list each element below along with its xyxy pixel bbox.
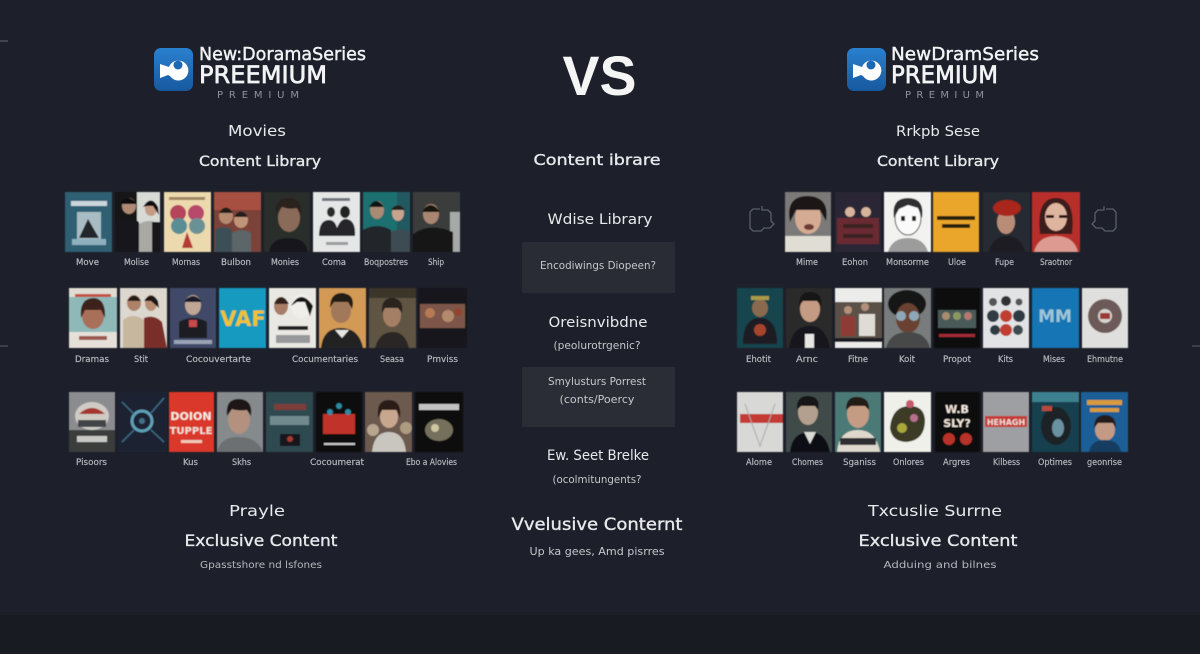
logo: right service xyxy=(847,44,1039,101)
poster labels row 1 right xyxy=(796,258,1072,268)
panel: right service xyxy=(737,44,1128,571)
poster labels row 3 right: Argres xyxy=(943,458,970,468)
poster labels row 1 left: Monies xyxy=(271,258,299,268)
poster row 2 left: VAF xyxy=(220,307,266,331)
poster labels row 1 left: Molise xyxy=(124,258,149,268)
poster labels row 2 right: Fitne xyxy=(848,355,868,365)
heading: VS: VS xyxy=(562,44,636,107)
poster row 2 right xyxy=(737,288,1128,348)
poster labels row 1 left xyxy=(76,258,444,268)
heading: content library left: Content Library xyxy=(199,154,321,170)
poster labels row 1 right: Uloe xyxy=(948,258,966,268)
heading: content library right: Content Library xyxy=(877,154,999,170)
poster labels row 1 right: Eohon xyxy=(842,258,868,268)
poster labels row 1 right: Fupe xyxy=(995,258,1014,268)
heading: content library center: Content ibrare xyxy=(534,151,660,169)
box: third comparison: Smylusturs Porrest xyxy=(548,376,646,388)
poster labels row 1 right: Mime xyxy=(796,258,818,268)
poster labels row 3 right: geonrise xyxy=(1087,458,1122,468)
logo: left service xyxy=(154,44,366,101)
text block: exclusive content right xyxy=(858,502,1018,571)
text block: exclusive content center: Vvelusive Conternt xyxy=(512,515,683,535)
poster labels row 2 left: Cocumentaries xyxy=(292,355,358,365)
poster labels row 2 left: Dramas xyxy=(75,355,109,365)
heading: right category: Rrkpb Sese xyxy=(896,124,980,140)
poster labels row 3 left: Pisoors xyxy=(76,458,107,468)
poster row 3 right: W.B xyxy=(945,403,969,416)
poster row 3 right xyxy=(737,392,1128,452)
text block: exclusive content left xyxy=(184,502,338,571)
poster labels row 2 left: Seasa xyxy=(380,355,404,365)
poster labels row 3 right: Optimes xyxy=(1038,458,1072,468)
label: second comparison: (peolurotrgenic? xyxy=(554,340,640,352)
box: first comparison: Encodiwings Diopeen? xyxy=(540,260,656,272)
poster labels row 2 right: Ehmutne xyxy=(1087,355,1123,365)
label: fourth comparison xyxy=(547,448,649,486)
label: fourth comparison: Ew. Seet Brelke xyxy=(547,448,649,464)
poster labels row 2 right: Koit xyxy=(899,355,915,365)
text block: exclusive content left: Exclusive Content xyxy=(184,531,338,550)
panel: left service xyxy=(65,44,467,571)
poster labels row 1 left: Ship xyxy=(428,258,444,268)
poster labels row 2 left: Cocouvertarte xyxy=(186,355,251,365)
icon: left device outline xyxy=(750,206,774,231)
panel: center comparison xyxy=(512,44,683,558)
text block: exclusive content center: Up ka gees, Amd pisrres xyxy=(530,546,664,558)
poster row 3 right: SLY? xyxy=(943,417,971,430)
poster labels row 3 right: Onlores xyxy=(893,458,924,468)
poster labels row 1 left: Bulbon xyxy=(221,258,251,268)
poster row 2 right: MM xyxy=(1038,307,1072,327)
logo: left service: PREEMIUM xyxy=(199,61,327,89)
text block: exclusive content right: Adduing and bilnes xyxy=(884,560,996,571)
icon: right device outline xyxy=(1092,206,1116,231)
poster labels row 3 right: Kilbess xyxy=(993,458,1020,468)
icon: right camera logo xyxy=(847,48,886,91)
logo: right service: PREMIUM xyxy=(905,90,984,101)
box: first comparison xyxy=(522,242,675,293)
poster labels row 2 left xyxy=(75,355,458,365)
poster row 2 left xyxy=(69,288,467,348)
poster labels row 3 left: Skhs xyxy=(232,458,251,468)
poster row 1 left xyxy=(65,192,460,252)
logo: left service: New:DoramaSeries xyxy=(199,44,366,65)
icon: left camera logo xyxy=(154,48,193,91)
poster labels row 3 right: Sganiss xyxy=(843,458,876,468)
label: second comparison xyxy=(548,315,648,352)
heading: movies: Movies xyxy=(228,122,286,140)
text block: exclusive content right: Txcuslie Surrne xyxy=(867,502,1002,520)
poster labels row 2 right: Arnc xyxy=(796,355,818,365)
poster labels row 2 right xyxy=(746,355,1123,365)
poster labels row 3 left: Ebo a Alovies xyxy=(406,458,457,468)
poster labels row 3 right: Chomes xyxy=(792,458,823,468)
poster row 3 left: DOION xyxy=(170,410,212,423)
poster labels row 3 right: Alome xyxy=(746,458,772,468)
text block: exclusive content left: Gpasstshore nd lsfones xyxy=(200,560,322,571)
poster labels row 3 left xyxy=(76,458,457,468)
poster labels row 2 right: Ehotit xyxy=(746,355,771,365)
logo: right service: NewDramSeries xyxy=(891,44,1039,65)
poster labels row 2 right: Propot xyxy=(943,355,971,365)
poster row 3 left: TUPPLE xyxy=(170,426,213,437)
poster labels row 1 right: Sraotnor xyxy=(1040,258,1072,268)
label: fourth comparison: (ocolmitungents? xyxy=(552,474,642,486)
poster row 3 right: HEHAGH xyxy=(987,418,1025,427)
poster row 1 right xyxy=(785,192,1080,252)
poster labels row 1 left: Move xyxy=(76,258,99,268)
poster labels row 2 left: Stit xyxy=(134,355,148,365)
box: third comparison: (conts/Poercy xyxy=(560,394,634,406)
text block: exclusive content right: Exclusive Content xyxy=(858,531,1018,550)
text block: exclusive content center xyxy=(512,515,683,558)
poster labels row 1 left: Boqpostres xyxy=(364,258,408,268)
poster labels row 2 right: Mises xyxy=(1043,355,1065,365)
poster labels row 1 left: Mornas xyxy=(172,258,200,268)
poster labels row 2 right: Kits xyxy=(998,355,1013,365)
poster row 3 left xyxy=(69,392,463,452)
logo: left service: PREMIUM xyxy=(217,90,299,101)
box: third comparison xyxy=(522,367,675,427)
poster labels row 3 left: Kus xyxy=(183,458,198,468)
label: second comparison: Oreisnvibdne xyxy=(548,315,648,331)
text block: exclusive content left: Prayle xyxy=(229,502,285,520)
poster labels row 2 left: Pmviss xyxy=(427,355,458,365)
poster labels row 3 left: Cocoumerat xyxy=(310,458,364,468)
poster labels row 1 left: Coma xyxy=(322,258,346,268)
logo: right service: PREMIUM xyxy=(891,61,998,89)
poster labels row 1 right: Monsorme xyxy=(886,258,929,268)
label: wdise library: Wdise Library xyxy=(548,212,652,228)
poster labels row 3 right xyxy=(746,458,1122,468)
